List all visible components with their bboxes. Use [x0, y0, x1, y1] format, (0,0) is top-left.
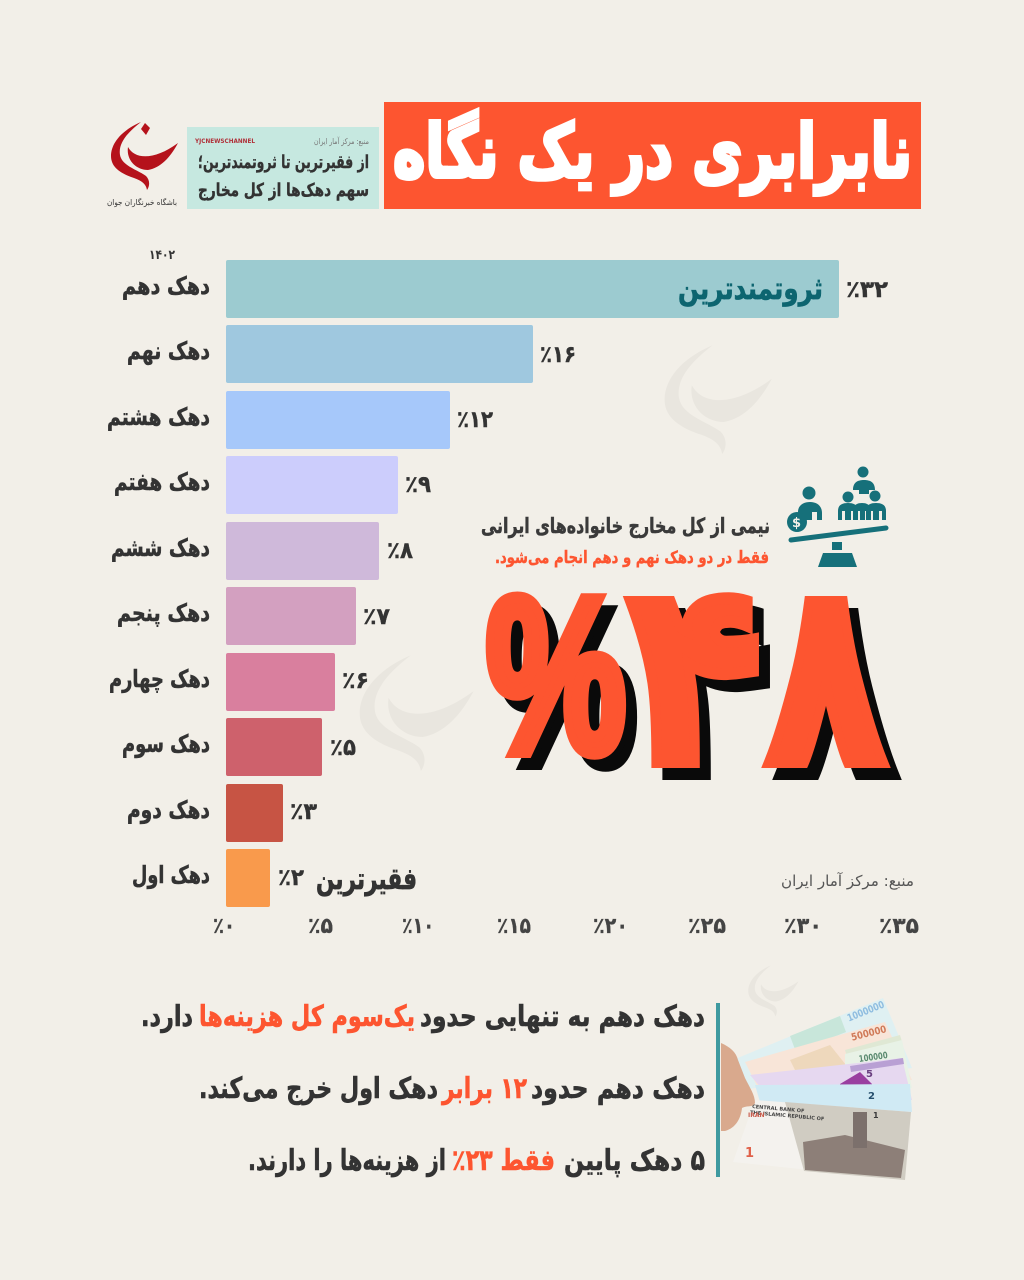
value: 6: ٪۶: [342, 668, 369, 694]
icon: scale with people: [787, 466, 886, 567]
x axis labels: [213, 914, 919, 939]
numerals: [486, 529, 886, 822]
x axis labels: ٪۰: [213, 914, 235, 939]
note: 1 front: [733, 1100, 911, 1180]
decile label: fourth: دهک چهارم: [109, 665, 210, 693]
note: 100000: [845, 1040, 912, 1090]
banknotes photo: 5: [866, 1069, 873, 1080]
bar: fourth decile: [226, 653, 335, 711]
takeaway line 3: ۵ دهک پایین: [564, 1143, 705, 1178]
value: 16: ٪۱۶: [540, 342, 576, 368]
banknotes photo: 1000000: [846, 1000, 886, 1024]
title banner: [384, 102, 921, 209]
takeaway line 2: [199, 1071, 705, 1105]
logo: [107, 122, 178, 207]
note: 500000: [745, 1022, 912, 1092]
bar: ninth decile: [226, 325, 533, 383]
decile label: third: دهک سوم: [122, 730, 210, 758]
x axis labels: ٪۱۰: [402, 914, 434, 939]
note: 2: [755, 1084, 912, 1112]
takeaway line 1: دهک دهم به تنهایی حدود: [420, 999, 705, 1033]
value: 32: ٪۳۲: [846, 277, 888, 303]
banknotes photo: 2: [868, 1091, 875, 1102]
value: 7: ٪۷: [363, 604, 390, 630]
decile label: sixth: دهک ششم: [111, 534, 210, 562]
source note: منبع: مرکز آمار ایران: [781, 872, 914, 890]
takeaway line 3: از هزینه‌ها را دارند.: [248, 1143, 446, 1177]
note: 1000000: [728, 998, 912, 1090]
banknotes photo: IRAN: [748, 1112, 765, 1119]
banknotes photo: THE ISLAMIC REPUBLIC OF: [750, 1110, 825, 1122]
decile label: eighth: دهک هشتم: [107, 403, 210, 431]
takeaway line 1: [141, 999, 705, 1033]
banknotes photo: CENTRAL BANK OF: [752, 1104, 805, 1115]
bar: sixth decile: [226, 522, 379, 580]
value: 2: ٪۲: [278, 865, 304, 891]
logo caption: باشگاه خبرنگاران جوان: [107, 197, 177, 207]
takeaway line 2: دهک دهم حدود: [531, 1071, 705, 1105]
numerals: ۸: [766, 529, 886, 822]
takeaway line 1: دارد.: [141, 999, 193, 1033]
numerals: %: [486, 552, 626, 800]
bar annotation: poorest: فقیرترین: [316, 862, 417, 897]
bar: seventh decile: [226, 456, 398, 514]
takeaway line 2: دهک اول خرج می‌کند.: [199, 1071, 438, 1105]
x axis labels: ٪۲۵: [688, 914, 726, 939]
bar: fifth decile: [226, 587, 356, 645]
watermark: upper logo: [665, 345, 772, 454]
bar: eighth decile: [226, 391, 450, 449]
bar: first decile: [226, 849, 270, 907]
banknotes photo: [721, 998, 912, 1180]
banknotes photo: 1: [873, 1111, 879, 1120]
source note: منبع: مرکز آمار ایران: [314, 136, 369, 146]
banknotes photo: 100000: [858, 1051, 888, 1065]
x axis labels: ٪۱۵: [497, 914, 531, 939]
value: 5: ٪۵: [330, 735, 356, 761]
x axis labels: ٪۵: [308, 914, 333, 939]
numerals: ۴: [628, 529, 762, 822]
x axis labels: ٪۳۵: [879, 914, 919, 939]
subtitle line 1: از فقیرترین تا ثروتمندترین؛: [198, 152, 369, 173]
channel handle: YJCNEWSCHANNEL: [194, 137, 255, 145]
decile label: seventh: دهک هفتم: [114, 468, 210, 496]
decile label: second: دهک دوم: [127, 796, 210, 824]
decile label: ninth: دهک نهم: [127, 337, 210, 365]
x axis labels: ٪۲۰: [593, 914, 628, 939]
value: 12: ٪۱۲: [457, 407, 493, 433]
banknotes photo: 500000: [850, 1024, 888, 1044]
watermark: middle logo: [360, 655, 474, 771]
bar: third decile: [226, 718, 322, 776]
takeaway line 1: یک‌سوم کل هزینه‌ها: [199, 999, 415, 1033]
bar: tenth decile: [226, 260, 839, 318]
watermark: lower logo: [748, 966, 798, 1016]
shadow: %: [497, 564, 637, 812]
shadow: [497, 541, 897, 834]
decile label: first: دهک اول: [132, 861, 210, 889]
note: 5: [750, 1058, 912, 1100]
value: 8: ٪۸: [387, 538, 413, 564]
takeaway line 3: فقط ۲۳٪: [452, 1143, 555, 1177]
big number 48 percent: [486, 529, 897, 834]
bar chart: [107, 260, 919, 939]
decile label: tenth: دهک دهم: [122, 272, 210, 300]
value: 9: ٪۹: [405, 472, 431, 498]
takeaway line 2: ۱۲ برابر: [440, 1071, 527, 1105]
subtitle line 2: سهم دهک‌ها از کل مخارج: [198, 180, 369, 201]
banknotes photo: 1: [745, 1146, 754, 1161]
value: 3: ٪۳: [290, 799, 317, 825]
hand: [721, 1043, 755, 1131]
bar: second decile: [226, 784, 283, 842]
vertical divider: [716, 1003, 720, 1177]
bar annotation: richest: ثروتمندترین: [678, 271, 823, 307]
decile label: fifth: دهک پنجم: [117, 599, 210, 627]
shadow: ۸: [777, 541, 897, 834]
year: ۱۴۰۲: [149, 248, 175, 263]
x axis labels: ٪۳۰: [784, 914, 822, 939]
icon: scale with people: $: [792, 516, 801, 531]
subtitle panel: [187, 127, 379, 209]
callout subheading: فقط در دو دهک نهم و دهم انجام می‌شود.: [495, 548, 769, 568]
shadow: ۴: [639, 541, 773, 834]
takeaway line 3: [248, 1143, 705, 1178]
callout heading: نیمی از کل مخارج خانواده‌های ایرانی: [481, 514, 770, 539]
